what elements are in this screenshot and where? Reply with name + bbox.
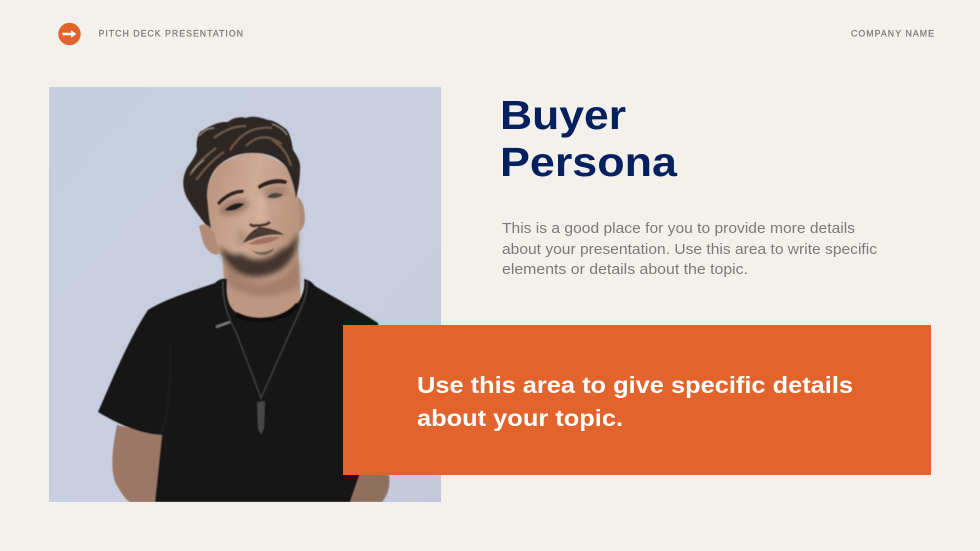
portrait photo bbox=[49, 87, 441, 502]
callout text bbox=[417, 372, 853, 431]
icon: arrow in orange circle bbox=[58, 23, 81, 45]
right ear bbox=[296, 197, 305, 232]
lips bbox=[248, 237, 280, 245]
body text bbox=[502, 220, 878, 278]
necklace bbox=[223, 281, 307, 398]
chin beard bbox=[252, 248, 274, 255]
neck bbox=[222, 245, 301, 319]
eyes bbox=[225, 203, 244, 211]
body text: This is a good place for you to provide more details bbox=[502, 220, 855, 237]
eyebrows bbox=[217, 190, 244, 205]
callout text: about your topic. bbox=[417, 405, 623, 431]
title line 1: Buyer bbox=[500, 92, 626, 138]
header label: pitch deck presentation: PITCH DECK PRESENTATION bbox=[98, 28, 243, 38]
callout: orange panel bbox=[343, 325, 931, 475]
facial shading bbox=[218, 184, 298, 277]
title bbox=[500, 92, 678, 185]
hair bbox=[183, 117, 300, 232]
face bbox=[207, 153, 300, 277]
title line 2: Persona bbox=[500, 139, 678, 185]
body text: about your presentation. Use this area to write specific bbox=[502, 241, 878, 258]
left ear bbox=[199, 224, 220, 255]
shirt label bbox=[216, 322, 230, 327]
callout text: Use this area to give specific details bbox=[417, 372, 853, 398]
hair highlights bbox=[190, 126, 291, 180]
body text: elements or details about the topic. bbox=[502, 261, 748, 278]
nose bbox=[250, 222, 270, 226]
moustache bbox=[243, 227, 284, 243]
slide: buyer persona bbox=[49, 22, 934, 502]
header label: company name: COMPANY NAME bbox=[851, 28, 934, 38]
t-shirt bbox=[98, 279, 385, 502]
arms bbox=[112, 425, 162, 502]
